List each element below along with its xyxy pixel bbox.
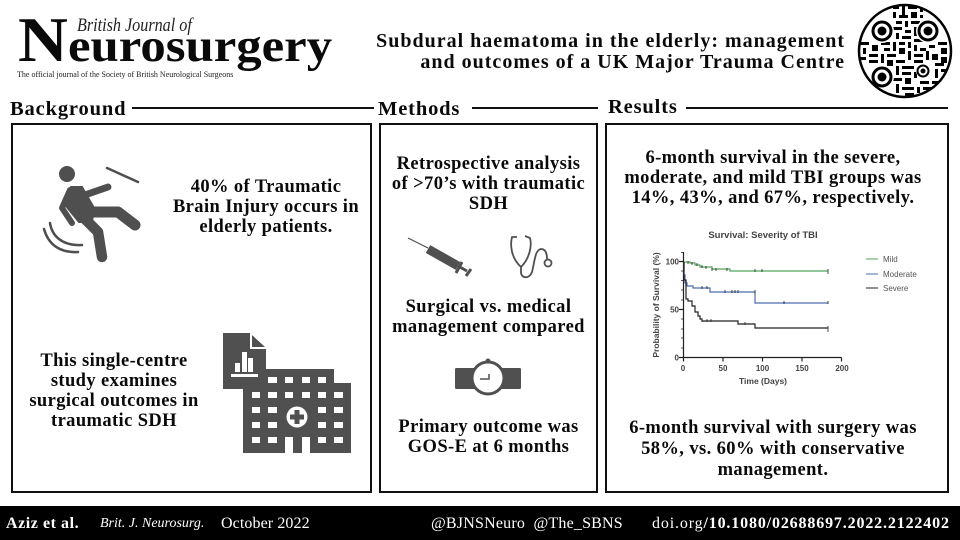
icon: hospital and report [223,333,351,453]
text: survival with surgery: management. [718,460,828,480]
text: primary outcome: GOS-E at 6 months [408,437,569,457]
text: survival by severity: 14%, 43%, and 67%, respectively. [632,188,914,208]
legend: Severe [883,284,909,293]
footer: DOI: doi.org/10.1080/02688697.2022.2122402 [652,515,950,532]
text: study description: traumatic SDH [51,411,177,431]
text: primary outcome: Primary outcome was [398,417,579,437]
footer: date: October 2022 [221,515,310,532]
text: survival with surgery: 6-month survival with surgery was [629,418,917,438]
tick labels: 200 [835,364,849,373]
panel: methods [379,123,598,493]
text: comparison: Surgical vs. medical [406,297,571,317]
journal logo: The official journal of the Society of British Neurological Surgeons [17,70,233,79]
title [376,30,845,73]
icon: watch [455,358,521,396]
tick labels: Time (Days) [739,376,787,386]
footer: social handles: @BJNSNeuro @The_SBNS [431,515,623,532]
tick labels: 50 [670,306,680,314]
QR code [858,4,952,98]
text: primary outcome [398,417,579,457]
panel: results [605,123,949,493]
journal logo: eurosurgery [68,20,332,72]
survival chart [651,252,917,386]
footer: authors: Aziz et al. [6,515,79,532]
legend: Moderate [883,270,917,279]
text: survival with surgery [629,418,917,480]
chart title: Survival: Severity of TBI [708,230,818,241]
footer bar [0,506,960,540]
text: TBI statistic: elderly patients. [199,217,333,237]
axes [679,252,842,362]
text: study description: This single-centre [40,351,188,371]
text: survival by severity: 6-month survival in the severe, [645,148,901,168]
text: retrospective analysis: Retrospective analysis [397,154,580,174]
tick labels: 0 [675,354,680,362]
curve: mild [684,262,828,271]
title: and outcomes of a UK Major Trauma Centre [420,51,845,73]
journal logo: N [18,4,68,75]
text: retrospective analysis [392,154,585,214]
tick labels: 100 [756,364,770,373]
journal logo [17,4,332,79]
tick labels: Probability of Survival (%) [651,252,661,358]
panel: background [11,123,372,493]
text: study description [29,351,199,431]
title: Subdural haematoma in the elderly: management [376,30,845,52]
text: retrospective analysis: SDH [469,194,508,214]
tick labels [651,252,849,386]
legend: Mild [883,255,898,264]
text: study description: study examines [51,371,177,391]
heading: Background: Background [10,98,126,120]
tick labels: 100 [666,258,680,266]
text: TBI statistic [173,177,359,237]
text: study description: surgical outcomes in [29,391,199,411]
tick labels: 150 [795,364,809,373]
text: survival with surgery: 58%, vs. 60% with conservative [641,439,905,459]
curve: moderate [684,262,828,303]
icon: falling person [42,166,140,262]
text: survival by severity: moderate, and mild TBI groups was [624,168,922,188]
text: TBI statistic: Brain Injury occurs in [173,197,359,217]
footer: journal: Brit. J. Neurosurg. [100,516,204,531]
text: TBI statistic: 40% of Traumatic [191,177,341,197]
heading: Results: Results [608,96,678,118]
journal logo: British Journal of [77,15,192,36]
icon: stethoscope [510,235,552,278]
text: comparison [392,297,585,337]
text: survival by severity [624,148,922,208]
curve: severe [684,262,828,328]
legend [866,255,917,293]
text: retrospective analysis: of >70’s with traumatic [392,174,585,194]
censor marks [688,261,828,332]
heading: Methods: Methods [378,98,460,120]
tick labels: 0 [681,364,686,373]
icon: syringe [408,238,472,277]
tick labels: 50 [719,364,728,373]
text: comparison: management compared [392,317,585,337]
